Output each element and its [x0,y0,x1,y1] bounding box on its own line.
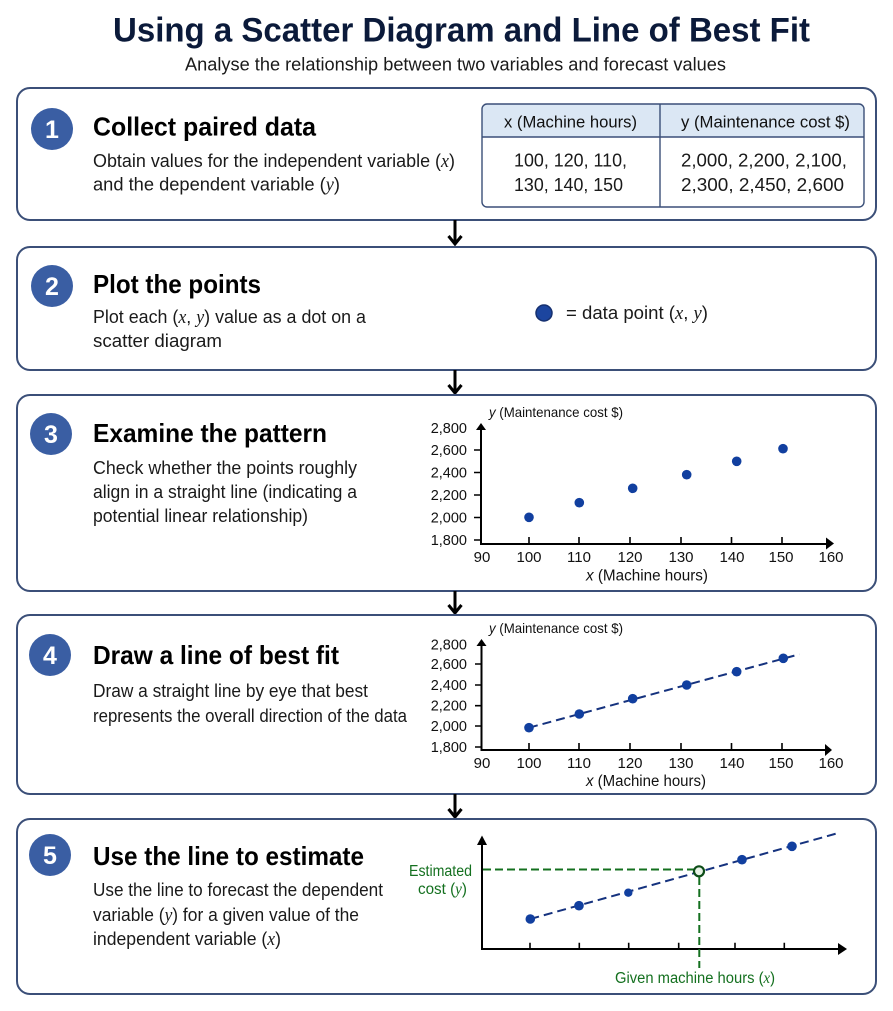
scatter chart: x (Machine hours) [585,568,708,584]
text: step 3 description: align in a straight line (indicating a [93,481,358,502]
text: step 5 description [93,879,383,950]
icon: step number 4: 4 [43,642,57,670]
text: step 4 description: represents the overall direction of the data [93,705,408,726]
heading: examine the pattern: Examine the pattern [93,418,327,448]
estimation chart: Given machine hours (x) [615,970,775,987]
scatter chart: 110 [567,549,591,566]
scatter chart with line of best fit: 2,800 [431,638,467,654]
arrow: step 4 to 5 [448,794,462,817]
heading: use the line to estimate: Use the line to estimate [93,841,364,871]
scatter chart with line of best fit: 160 [818,755,844,772]
text: step 2 description: scatter diagram [93,330,222,351]
icon: step number 5: 5 [43,842,57,870]
text: step 5 description: variable (y) for a given value of the [93,904,359,926]
scatter chart: 1,800 [431,533,467,549]
text: step 1 description: and the dependent variable (y) [93,174,340,196]
scatter chart: 120 [617,549,643,566]
arrow: step 3 to 4 [448,591,462,613]
heading: collect paired data: Collect paired data [93,112,317,142]
subtitle: Analyse the relationship between two variables and forecast values [185,54,726,74]
icon: step number 3 [30,413,72,455]
scatter chart with line of best fit: y (Maintenance cost $) [488,620,623,636]
scatter chart with line of best fit: 100 [516,755,542,772]
text: step 1 description: Obtain values for the independent variable (x) [93,150,455,172]
data table: 2,000, 2,200, 2,100, [681,150,847,170]
text: step 5 description: independent variable (x) [93,928,281,950]
legend: data point: = data point (x, y) [566,302,708,324]
scatter chart: 90 [474,549,490,566]
icon: step number 3: 3 [44,421,58,449]
heading: draw a line of best fit: Draw a line of best fit [93,640,339,670]
scatter chart: 160 [818,549,844,566]
scatter chart with line of best fit: 120 [617,755,643,772]
heading: plot the points: Plot the points [93,269,261,299]
scatter chart with line of best fit: 2,400 [431,678,467,694]
scatter chart: 2,400 [431,466,467,482]
estimation chart: Estimated [409,863,472,880]
scatter chart: 150 [768,549,794,566]
arrow: step 2 to 3 [448,370,462,393]
scatter chart with line of best fit: x (Machine hours) [585,773,706,790]
data table: y (Maintenance cost $) [681,112,850,132]
icon: step number 1: 1 [45,116,59,144]
scatter chart: 100 [516,549,542,566]
scatter chart with line of best fit: 1,800 [431,740,467,756]
arrow: step 1 to 2 [448,220,462,244]
panel: step 5 use the line to estimate [17,819,876,994]
scatter chart with line of best fit: 150 [768,755,794,772]
data table: 2,300, 2,450, 2,600 [681,174,844,195]
scatter chart: 130 [668,549,694,566]
text: step 4 description: Draw a straight line by eye that best [93,680,368,701]
scatter chart: 2,600 [431,443,467,459]
panel: step 2 plot the points [17,247,876,370]
estimation chart: cost (y) [418,881,467,898]
scatter chart with line of best fit: 2,200 [431,699,467,715]
icon: step number 2 [31,265,73,307]
text: step 1 description [93,150,455,196]
scatter chart with line of best fit: 90 [474,755,490,772]
icon: step number 2: 2 [45,273,59,301]
text: step 2 description: Plot each (x, y) value as a dot on a [93,306,367,328]
panel: step 3 examine the pattern [17,395,876,591]
scatter chart with line of best fit [431,620,844,790]
data table: x (Machine hours) [504,112,637,132]
scatter chart with line of best fit: 2,600 [431,657,467,673]
scatter chart: 2,000 [431,510,467,526]
data table [482,104,864,207]
panel: step 4 draw a line of best fit [17,615,876,794]
text: step 3 description: Check whether the points roughly [93,457,358,478]
scatter chart with line of best fit: 2,000 [431,719,467,735]
panel: step 1 collect paired data [17,88,876,220]
text: step 2 description [93,306,367,351]
scatter chart: 140 [719,549,745,566]
data table: 130, 140, 150 [514,174,623,195]
estimation chart [409,833,847,987]
scatter chart with line of best fit: 140 [719,755,745,772]
scatter chart: 2,800 [431,421,467,437]
scatter chart: 2,200 [431,488,467,504]
scatter chart with line of best fit: 130 [668,755,694,772]
text: step 5 description: Use the line to forecast the dependent [93,879,383,900]
icon: step number 4 [29,634,71,676]
scatter chart: y (Maintenance cost $) [488,404,623,420]
text: step 3 description: potential linear relationship) [93,505,308,526]
icon: step number 5 [29,834,71,876]
scatter chart with line of best fit: 110 [567,755,591,772]
icon: step number 1 [31,108,73,150]
text: step 4 description [93,680,408,726]
text: step 3 description [93,457,358,526]
title: Using a Scatter Diagram and Line of Best Fit [113,12,810,50]
data table: 100, 120, 110, [514,150,627,170]
scatter chart [431,404,844,584]
